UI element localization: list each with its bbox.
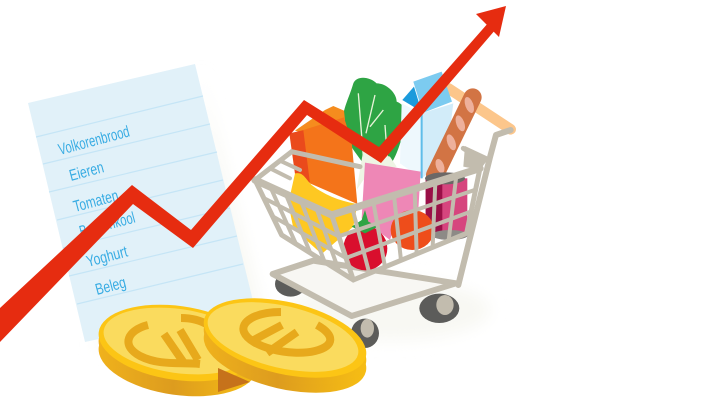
- right coin: [196, 284, 374, 400]
- orange tomato: [391, 210, 434, 250]
- list item: Volkorenbrood: Volkorenbrood: [57, 124, 132, 159]
- wheels: [275, 271, 459, 348]
- list item: Eieren: Eieren: [68, 159, 106, 185]
- shopping list paper: [28, 64, 254, 342]
- leafy greens: [342, 78, 407, 190]
- list item: Boerenkool: Boerenkool: [78, 210, 137, 241]
- baguette: [434, 96, 476, 175]
- orange box: [289, 106, 357, 204]
- list item: Yoghurt: Yoghurt: [85, 243, 130, 271]
- cart shelf: [273, 261, 456, 316]
- cart handle: [448, 88, 511, 129]
- list item: Beleg: Beleg: [94, 274, 128, 299]
- bananas: [288, 173, 357, 254]
- soft shadow: [95, 70, 490, 350]
- shopping cart: [255, 72, 511, 348]
- pink bag: [362, 163, 421, 240]
- red rising arrow: [0, 6, 506, 342]
- left coin: [94, 295, 262, 400]
- milk carton: [400, 72, 453, 178]
- cart frame: [458, 130, 511, 285]
- cart basket wire grid: [255, 148, 482, 280]
- can: [425, 172, 468, 240]
- red tomato: [343, 210, 387, 270]
- list item: Tomaten: Tomaten: [72, 188, 120, 216]
- coins: [94, 284, 374, 400]
